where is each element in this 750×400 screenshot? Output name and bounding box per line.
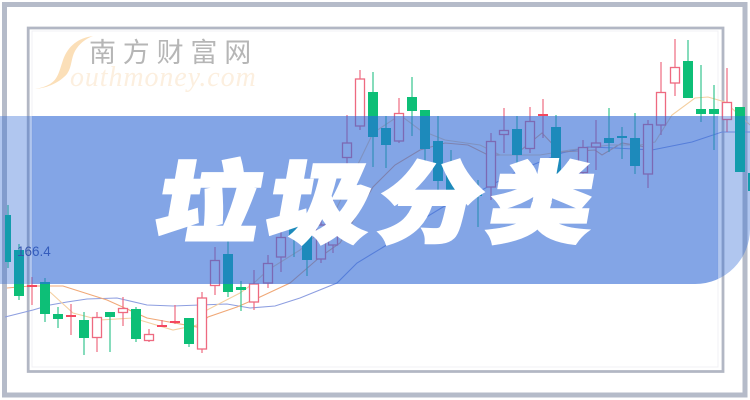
- logo swoosh S: [35, 36, 93, 89]
- moving average lines: [5, 97, 750, 330]
- title: 垃圾分类: [148, 133, 614, 261]
- inner frame: [28, 28, 723, 372]
- blue title band: [0, 116, 750, 284]
- logo latin name: outhmoney.com: [70, 62, 257, 93]
- logo chinese name: 南方财富网: [89, 31, 258, 70]
- price label: 166.4: [17, 244, 51, 259]
- logo: southmoney: [35, 31, 258, 93]
- candlestick chart: [5, 39, 750, 355]
